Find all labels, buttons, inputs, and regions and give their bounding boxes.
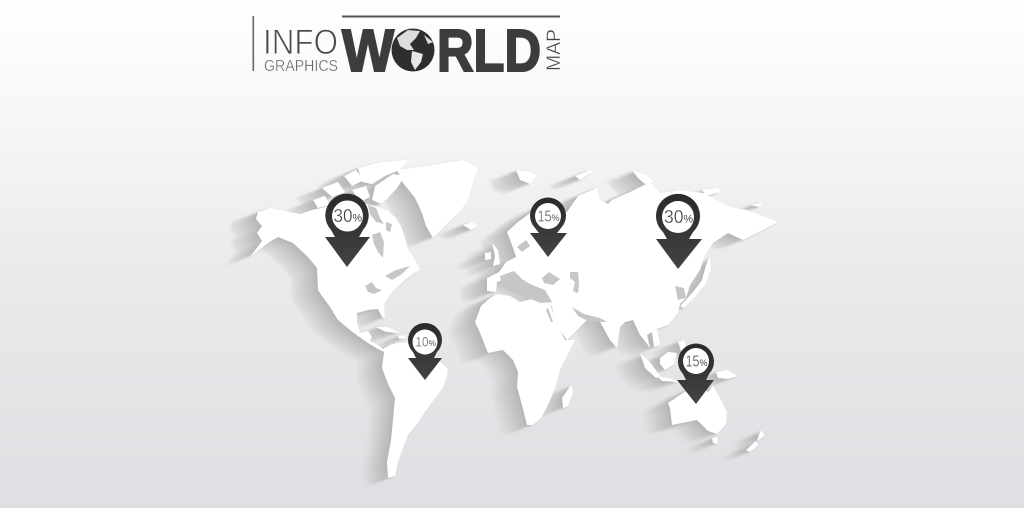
pin: Australia 15%: % [700,358,708,369]
pin: South America 10%: 10 [416,334,428,350]
continents [250,160,778,478]
title: GRAPHICS: GRAPHICS [264,58,338,75]
icon: globe [392,28,434,72]
pin: Europe 15%: 15 [538,208,552,226]
pin: Europe 15% [530,198,567,257]
world map with long shadow [224,160,778,488]
title: W: W [342,18,394,84]
title lockup [252,16,565,84]
pin: Australia 15%: 15 [686,354,700,370]
pin: North America 30% [325,194,370,267]
pin: South America 10%: % [428,338,436,348]
pin: Asia 30%: % [684,214,693,226]
pin: Asia 30%: 30 [664,206,684,227]
title: RLD: RLD [437,18,541,84]
pin: North America 30%: % [352,212,362,224]
inland seas and lakes [365,205,686,322]
pin: North America 30%: 30 [334,205,352,226]
pin: Europe 15%: % [552,213,560,224]
pin: Australia 15% [677,344,714,404]
title: INFO: INFO [263,23,338,62]
pin: Asia 30% [656,194,702,269]
title rules [252,16,560,71]
pin: South America 10% [408,323,442,380]
map shadow [224,161,776,488]
title: MAP: MAP [544,29,565,71]
